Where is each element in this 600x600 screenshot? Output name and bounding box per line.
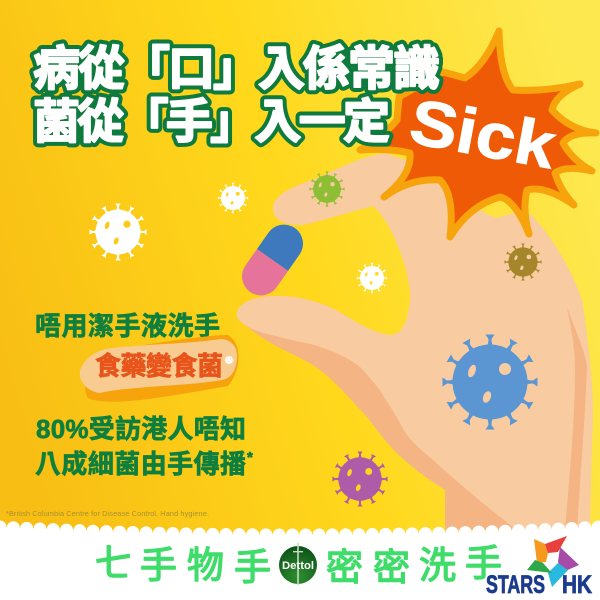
callout: pill to germ pun [80, 335, 239, 402]
virus: green on finger [309, 171, 345, 207]
footer slogan: 密 [373, 537, 410, 591]
virus: large white [90, 204, 146, 260]
title: 菌從「手」入一定 [33, 95, 390, 148]
logo wordmark: STARS [486, 571, 545, 599]
logo: Dettol badge [279, 543, 317, 585]
title: 菌從「手」入一定 [33, 95, 390, 148]
title: 病從「口」入係常識 [33, 42, 440, 95]
footer slogan: 洗 [419, 535, 456, 589]
burst label: Sick [404, 85, 562, 182]
virus: olive [504, 243, 542, 281]
text: survey statistic: 八成細菌由手傳播 [35, 449, 246, 479]
footer scalloped band [0, 527, 600, 600]
virus: small white upper left [218, 183, 248, 213]
logo: Stars HK: HK [562, 571, 592, 599]
virus: small white near thumb [357, 263, 387, 293]
footer slogan: 七 [95, 533, 132, 587]
text: survey statistic: 80%受訪港人唔知 [36, 414, 246, 444]
footer slogan: 密 [326, 537, 363, 591]
footer slogan [95, 533, 502, 591]
title [33, 42, 440, 148]
footer slogan: 物 [187, 535, 224, 589]
footer slogan: 手 [234, 537, 271, 591]
footer slogan: 手 [465, 533, 502, 587]
burst: Sick starburst [360, 31, 596, 237]
Dettol wordmark: Dettol [282, 560, 314, 572]
icon: tiny germ [224, 355, 234, 365]
text: survey statistic: * [247, 449, 253, 466]
virus: blue [442, 334, 538, 430]
title: 病從「口」入係常識 [33, 42, 440, 95]
text: do not skip sanitiser: 唔用潔手液洗手 [35, 311, 220, 341]
callout text: 食藥變食菌 [95, 351, 223, 381]
virus: purple [332, 451, 388, 507]
footnote source: *British Columbia Centre for Disease Control. Hand hygiene. [6, 509, 209, 518]
icon: capsule pill [235, 217, 310, 303]
text: survey statistic [35, 414, 253, 479]
logo: Stars HK [486, 536, 592, 599]
illustration: hand pinching pill [237, 153, 593, 530]
footer slogan: 手 [140, 535, 177, 589]
